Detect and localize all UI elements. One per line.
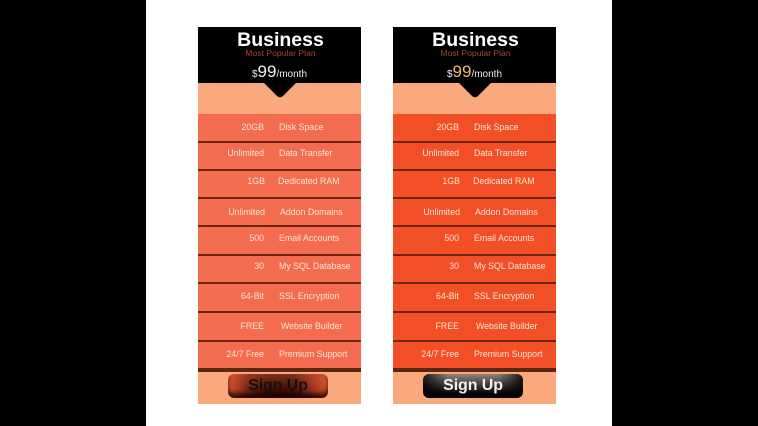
feature: ssl encryption	[198, 284, 361, 313]
feature: data transfer: Data Transfer	[279, 148, 332, 158]
feature: sql database: 30	[254, 261, 264, 271]
feature: addon domains: Addon Domains	[475, 207, 538, 217]
feature: data transfer: Unlimited	[227, 148, 264, 158]
feature: data transfer	[393, 143, 556, 171]
feature: sql database	[393, 256, 556, 284]
feature: dedicated ram: Dedicated RAM	[473, 176, 535, 186]
feature: disk space	[198, 114, 361, 143]
feature: email accounts: 500	[249, 233, 264, 243]
feature: premium support	[198, 342, 361, 370]
sign up button	[423, 374, 523, 398]
sign up button: Sign Up	[443, 377, 503, 394]
feature: addon domains: Unlimited	[228, 207, 265, 217]
feature: addon domains: Addon Domains	[280, 207, 343, 217]
plan price: $99/month	[447, 62, 502, 81]
feature: email accounts	[393, 227, 556, 256]
feature: website builder: Website Builder	[281, 321, 342, 331]
feature: website builder	[198, 313, 361, 342]
panel: left pricing plan	[198, 27, 361, 404]
feature: premium support: 24/7 Free	[421, 349, 459, 359]
header arrow	[263, 65, 297, 99]
feature: data transfer	[198, 143, 361, 171]
sign up button	[228, 374, 328, 398]
feature: dedicated ram: 1GB	[442, 176, 460, 186]
plan subtitle: Most Popular Plan	[245, 48, 316, 58]
feature: email accounts: Email Accounts	[279, 233, 339, 243]
feature: premium support: 24/7 Free	[226, 349, 264, 359]
plan price: $99/month	[252, 62, 307, 81]
feature: addon domains	[393, 199, 556, 227]
feature: website builder: Website Builder	[476, 321, 537, 331]
white sheet background	[146, 0, 612, 426]
feature: sql database	[198, 256, 361, 284]
feature: website builder: FREE	[241, 321, 264, 331]
feature: sql database: 30	[449, 261, 459, 271]
plan header	[393, 27, 556, 83]
feature: ssl encryption	[393, 284, 556, 313]
panel: right pricing plan	[393, 27, 556, 404]
feature: ssl encryption: 64-Bit	[241, 291, 264, 301]
header arrow	[458, 65, 492, 99]
feature: disk space: 20GB	[242, 122, 264, 132]
feature: sql database: My SQL Database	[474, 261, 546, 271]
feature: premium support: Premium Support	[474, 349, 542, 359]
feature: dedicated ram	[393, 171, 556, 199]
feature: disk space: Disk Space	[474, 122, 518, 132]
feature: dedicated ram: 1GB	[247, 176, 265, 186]
feature: addon domains	[198, 199, 361, 227]
feature: email accounts: 500	[444, 233, 459, 243]
sign up button: Sign Up	[248, 377, 308, 394]
feature: disk space: Disk Space	[279, 122, 324, 132]
feature: dedicated ram: Dedicated RAM	[278, 176, 340, 186]
feature: email accounts	[198, 227, 361, 256]
feature: dedicated ram	[198, 171, 361, 199]
feature: addon domains: Unlimited	[423, 207, 460, 217]
feature: disk space	[393, 114, 556, 143]
feature: data transfer: Unlimited	[422, 148, 459, 158]
feature: website builder	[393, 313, 556, 342]
plan title: Business	[432, 29, 519, 51]
feature: data transfer: Data Transfer	[474, 148, 527, 158]
plan subtitle: Most Popular Plan	[440, 48, 511, 58]
feature: email accounts: Email Accounts	[474, 233, 534, 243]
feature: ssl encryption: SSL Encryption	[279, 291, 339, 301]
feature: premium support: Premium Support	[279, 349, 347, 359]
feature: disk space: 20GB	[436, 122, 459, 132]
feature: ssl encryption: 64-Bit	[436, 291, 459, 301]
plan title: Business	[237, 29, 324, 51]
feature: website builder: FREE	[436, 321, 459, 331]
feature: sql database: My SQL Database	[279, 261, 351, 271]
feature: premium support	[393, 342, 556, 370]
plan header	[198, 27, 361, 83]
feature: ssl encryption: SSL Encryption	[474, 291, 534, 301]
